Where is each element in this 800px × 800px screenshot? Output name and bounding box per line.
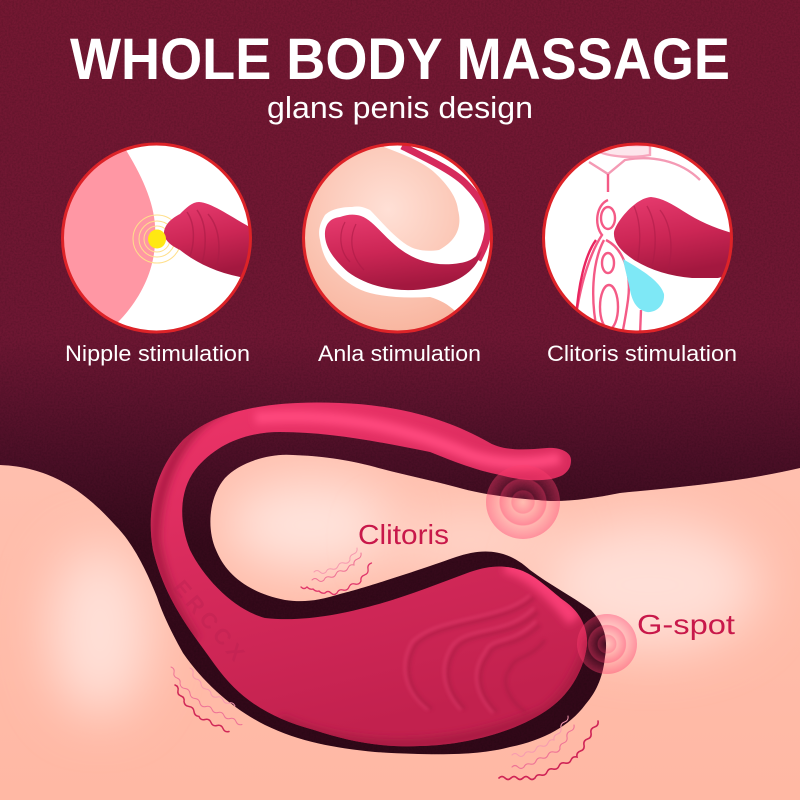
label: clitoris: Clitoris [358, 519, 449, 550]
vibration lines: upper [301, 548, 372, 594]
title: WHOLE BODY MASSAGE [70, 27, 730, 92]
cord [402, 146, 488, 260]
tail shading [155, 408, 225, 640]
pulse: clitoris [486, 465, 560, 539]
panel: anal stimulation [302, 142, 493, 334]
panel: clitoris stimulation [544, 144, 735, 335]
pulse: g-spot [577, 614, 637, 674]
white outline band [319, 146, 490, 311]
subtitle: glans penis design [267, 90, 533, 125]
massager body [151, 402, 590, 746]
body shading [280, 640, 590, 744]
tail highlight [255, 417, 560, 463]
light ridges [405, 595, 536, 713]
head ridges [187, 210, 219, 270]
water drop [623, 259, 664, 312]
panel: nipple stimulation [61, 142, 252, 334]
embossed logo: ERCCX [168, 575, 253, 669]
massager head [614, 197, 735, 278]
label: g-spot: G-spot [637, 609, 735, 640]
vibration lines: lower left [171, 667, 242, 732]
ridges [634, 206, 672, 259]
ridges [341, 222, 364, 270]
skin background [0, 440, 800, 800]
label: clitoris stimulation: Clitoris stimulation [547, 341, 737, 366]
massager body [325, 215, 482, 290]
pink line art [576, 146, 701, 330]
label: nipple stimulation: Nipple stimulation [65, 341, 250, 366]
dark ridges [409, 598, 545, 712]
vibration lines: lower right [499, 716, 598, 780]
label: anla stimulation: Anla stimulation [318, 341, 481, 366]
massager head [164, 202, 255, 278]
tip highlight [505, 565, 575, 620]
pink area [64, 150, 156, 322]
yellow pulse rings [133, 215, 181, 263]
yellow dot [148, 230, 166, 248]
